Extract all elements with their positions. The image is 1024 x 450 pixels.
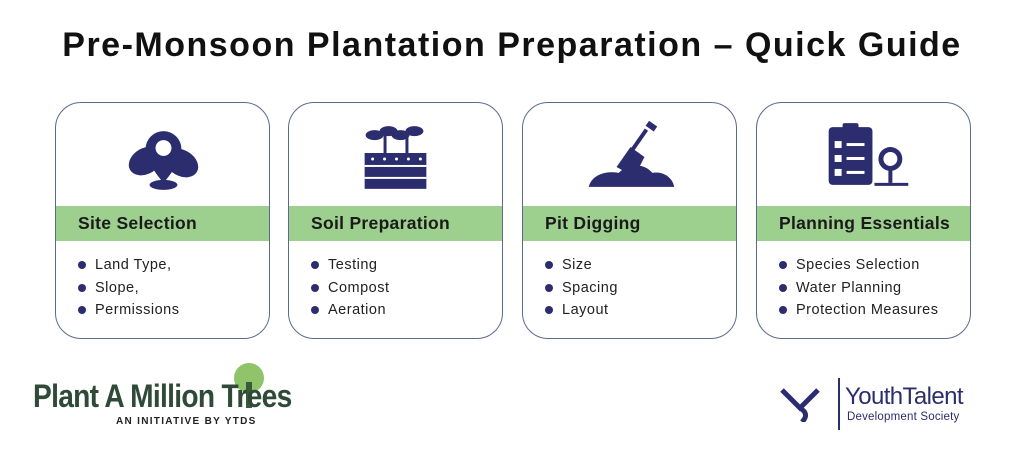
list: Slope, [95, 280, 139, 296]
list: Testing [328, 257, 377, 273]
logo: youth talent development society: Development Society [847, 411, 959, 423]
list: Species Selection [796, 257, 920, 273]
list [779, 257, 938, 318]
logo: youth talent development society [780, 378, 964, 430]
icon: tree [234, 363, 264, 408]
heading: Planning Essentials [779, 213, 950, 233]
logo: plant a million trees [33, 363, 292, 427]
list: Water Planning [796, 280, 902, 296]
icon: soil layers [364, 126, 426, 189]
panel: pit digging [522, 102, 737, 339]
heading [289, 206, 502, 241]
logo: plant a million trees: Plant A Million Trees [33, 378, 292, 414]
icon: location pin with leaves [128, 131, 198, 190]
heading [56, 206, 269, 241]
list: Compost [328, 280, 390, 296]
logo: plant a million trees: AN INITIATIVE BY YTDS [116, 416, 257, 427]
list: Land Type, [95, 257, 172, 273]
list: Size [562, 257, 592, 273]
list: Layout [562, 302, 609, 318]
list [311, 257, 390, 318]
heading [757, 206, 970, 241]
icon: y symbol [780, 388, 820, 422]
heading [523, 206, 736, 241]
list [545, 257, 618, 318]
list: Spacing [562, 280, 618, 296]
panel: soil preparation [288, 102, 503, 339]
list: Protection Measures [796, 302, 938, 318]
panel: site selection [55, 102, 270, 339]
icon: clipboard with tree [828, 123, 908, 186]
heading: Pit Digging [545, 213, 641, 233]
heading: Soil Preparation [311, 213, 450, 233]
logo: youth talent development society: YouthTalent [845, 383, 963, 410]
icon: shovel in soil [588, 121, 674, 187]
panel: planning essentials [756, 102, 971, 339]
list: Permissions [95, 302, 179, 318]
list [78, 257, 179, 318]
list: Aeration [328, 302, 386, 318]
title: Pre-Monsoon Plantation Preparation – Quick Guide [62, 26, 962, 64]
heading: Site Selection [78, 213, 197, 233]
